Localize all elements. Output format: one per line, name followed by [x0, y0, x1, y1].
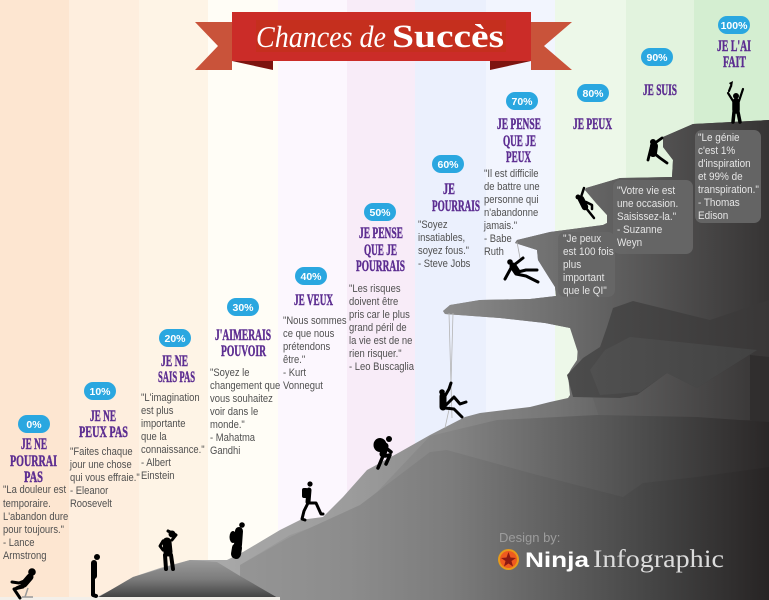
stage 0%	[3, 415, 69, 562]
stage 60%: JE	[443, 181, 455, 198]
rope	[445, 313, 453, 428]
stage 40%: "Nous sommes	[283, 315, 347, 327]
stage 100%: 100%	[721, 20, 748, 32]
credit: Design by Ninja Infographic: Ninja	[525, 549, 589, 572]
figure: walker	[302, 481, 323, 520]
stage 70%: Ruth	[484, 246, 504, 258]
stage 20%: "L'imagination	[141, 392, 200, 404]
stage 30%: Gandhi	[210, 445, 240, 457]
stage 60%: "Soyez	[418, 219, 448, 231]
stage 60%: 60%	[437, 159, 459, 171]
stage 40%: Vonnegut	[283, 380, 323, 392]
stage 40%	[283, 267, 347, 392]
stage 90%: une occasion.	[617, 199, 678, 210]
stage 100%: d'inspiration	[698, 159, 751, 170]
stage 10%: "Faites chaque	[70, 446, 133, 458]
figure: cliff climber	[576, 188, 594, 218]
stage 60%: POURRAIS	[432, 198, 480, 215]
mountain	[0, 120, 769, 600]
stage 40%: JE VEUX	[294, 292, 333, 309]
stage 90%: Weyn	[617, 238, 642, 249]
stage 50%: doivent être	[349, 296, 399, 308]
stage 50%: JE PENSE	[359, 225, 403, 242]
stage 80%: que le QI"	[563, 286, 607, 297]
stage 80%: est 100 fois	[563, 247, 614, 258]
stage 60%	[418, 155, 480, 270]
stage 70%: 70%	[511, 96, 533, 108]
stage 90%: - Suzanne	[617, 225, 662, 236]
stage 0%: "La douleur est	[3, 484, 66, 496]
stage 10%: JE NE	[90, 408, 116, 425]
stage 80%: "Je peux	[563, 234, 602, 245]
credit: Design by Ninja Infographic	[498, 530, 724, 573]
stage 80%	[558, 84, 615, 297]
stage 0%: POURRAI	[10, 453, 57, 470]
stage 20%: connaissance."	[141, 444, 205, 456]
stage 50%: pris car le plus	[349, 309, 410, 321]
stage 100%: - Thomas	[698, 198, 740, 209]
stage 30%	[210, 298, 281, 457]
stage 70%: JE PENSE	[497, 116, 541, 133]
figure: standing head down	[93, 554, 100, 596]
stage 20%	[141, 329, 205, 482]
stage 30%: voir dans le	[210, 406, 259, 418]
stage 50%: "Les risques	[349, 283, 401, 295]
stage 70%: personne qui	[484, 194, 539, 206]
stage 90%: "Votre vie est	[617, 186, 675, 197]
stage 40%: - Kurt	[283, 367, 306, 379]
stage 10%: qui vous effraie."	[70, 472, 140, 484]
stage 20%: est plus	[141, 405, 174, 417]
stage 70%: "Il est difficile	[484, 168, 539, 180]
stage 20%: que la	[141, 431, 167, 443]
stage 100%: et 99% de	[698, 172, 743, 183]
stage 70%: PEUX	[506, 149, 531, 166]
stage 50%: rien risquer."	[349, 348, 402, 360]
stage 100%: "Le génie	[698, 133, 740, 144]
stage 80%: plus	[563, 260, 581, 271]
stage 0%: JE NE	[21, 436, 47, 453]
stage 90%: JE SUIS	[643, 82, 677, 99]
credit: Design by Ninja Infographic: Design by:	[499, 530, 560, 545]
stage 0%: PAS	[24, 469, 43, 486]
stage 50%: grand péril de	[349, 322, 407, 334]
banner title: Chances de	[256, 19, 386, 54]
stage 0%: temporaire.	[3, 498, 51, 510]
stage 0%: pour toujours."	[3, 524, 64, 536]
stage 70%	[483, 92, 541, 258]
stage 100%: FAIT	[723, 54, 746, 71]
figure: ledge climber	[505, 242, 538, 282]
stage 30%: POUVOIR	[221, 343, 266, 360]
stage 70%: QUE JE	[503, 133, 536, 150]
stage 10%: 10%	[89, 386, 111, 398]
stage 50%: la vie est de ne	[349, 335, 413, 347]
stage 50%	[349, 203, 414, 373]
stage 90%	[613, 48, 693, 254]
stage 10%: Roosevelt	[70, 498, 112, 510]
figure: rope climber	[439, 383, 466, 417]
stage 50%: POURRAIS	[356, 258, 405, 275]
stage 30%: changement que	[210, 380, 281, 392]
figure: hiker	[374, 436, 392, 468]
stage 60%: insatiables,	[418, 232, 465, 244]
stage 20%: JE NE	[161, 353, 188, 370]
stage 40%: ce que nous	[283, 328, 334, 340]
stage 60%: - Steve Jobs	[418, 258, 470, 270]
credit: Design by Ninja Infographic: Infographic	[593, 546, 724, 573]
stage 90%: Saisissez-la."	[617, 212, 677, 223]
stage 30%: 30%	[232, 302, 254, 314]
stage 100%: transpiration."	[698, 185, 759, 196]
stage 80%: JE PEUX	[573, 116, 612, 133]
stage 20%: SAIS PAS	[158, 369, 195, 386]
stage 0%: 0%	[26, 419, 42, 431]
stage 50%: QUE JE	[364, 242, 397, 259]
figure: man with pack	[230, 522, 245, 554]
stage 20%: importante	[141, 418, 186, 430]
stage 50%: 50%	[369, 207, 391, 219]
stage 20%: Einstein	[141, 470, 175, 482]
stage 0%: - Lance	[3, 537, 35, 549]
banner title: Succès	[392, 19, 504, 55]
stage 30%: monde."	[210, 419, 245, 431]
stage 10%: PEUX PAS	[79, 424, 128, 441]
stage 10%: jour une chose	[69, 459, 132, 471]
stage 80%: important	[563, 273, 604, 284]
stage 40%: 40%	[300, 271, 322, 283]
stage 70%: n'abandonne	[484, 207, 539, 219]
stage 10%: - Eleanor	[70, 485, 109, 497]
stage 30%: "Soyez le	[210, 367, 250, 379]
stage 70%: - Babe	[484, 233, 512, 245]
figure: upper climber	[648, 138, 667, 163]
stage 0%: L'abandon dure	[3, 511, 69, 523]
stage 100%: c'est 1%	[698, 146, 735, 157]
stage 30%: - Mahatma	[210, 432, 255, 444]
stage 80%: 80%	[582, 88, 604, 100]
figure: victorious man	[728, 81, 743, 122]
stage 50%: - Leo Buscaglia	[349, 361, 414, 373]
stage 70%: jamais."	[483, 220, 517, 232]
stage 10%	[69, 382, 140, 510]
banner title	[195, 12, 572, 70]
stage 90%: 90%	[646, 52, 668, 64]
stage 0%: Armstrong	[3, 550, 46, 562]
stage 30%: J'AIMERAIS	[215, 327, 271, 344]
figure: man shading eyes	[160, 530, 176, 569]
stage 60%: soyez fous."	[418, 245, 469, 257]
stage 20%: - Albert	[141, 457, 171, 469]
stage 20%: 20%	[164, 333, 186, 345]
stage 30%: vous souhaitez	[210, 393, 273, 405]
stage 40%: être."	[283, 354, 306, 366]
stage 70%: de battre une	[484, 181, 540, 193]
stage 40%: prétendons	[283, 341, 330, 353]
stage 100%	[695, 16, 761, 223]
stage 100%: Edison	[698, 211, 729, 222]
figure: sitting man	[12, 568, 36, 598]
